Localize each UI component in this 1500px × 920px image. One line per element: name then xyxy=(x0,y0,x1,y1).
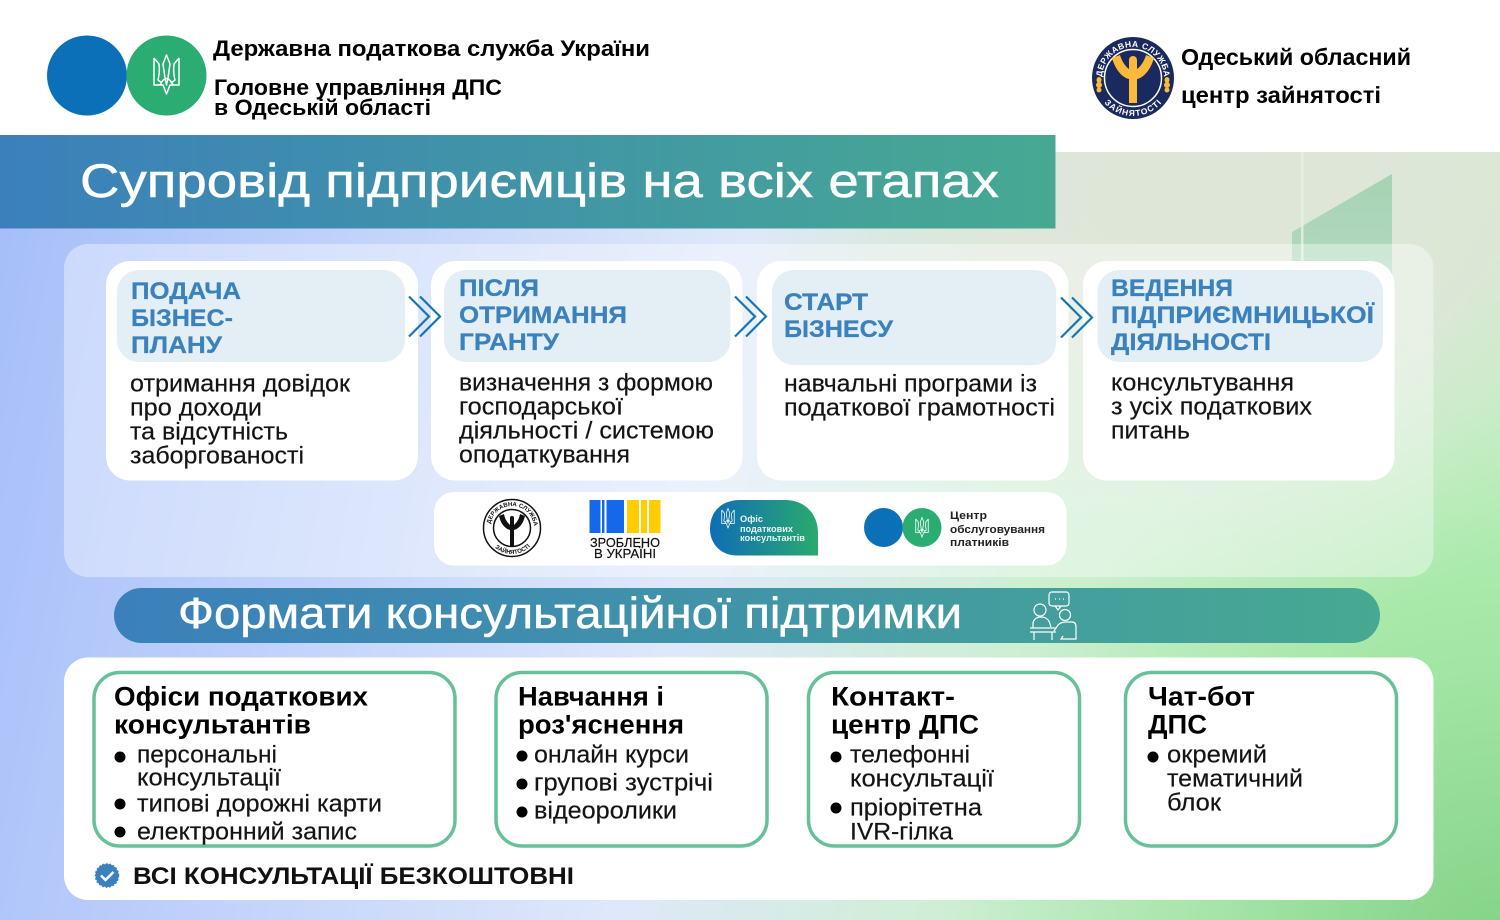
card: business plan submission: БІЗНЕС- xyxy=(131,305,233,332)
box: tax consultants offices: Офіси податкових xyxy=(114,682,368,712)
icon: made in Ukraine logo: В УКРАЇНІ xyxy=(594,547,656,561)
card: after grant: господарської xyxy=(459,394,623,420)
icon: tax consultants office logo: Офіс xyxy=(740,514,763,524)
card: business plan submission: ПЛАНУ xyxy=(131,332,223,359)
icon: consultation people xyxy=(1030,592,1076,640)
card: business plan submission: заборгованості xyxy=(130,442,304,470)
header: employment center logo and name xyxy=(1092,37,1411,119)
section heading band: Формати консультаційної підтримки xyxy=(178,589,962,638)
card: after grant: ПІСЛЯ xyxy=(459,275,539,302)
icon: employment service emblem: ДЕРЖАВНА СЛУЖБА xyxy=(1096,41,1170,78)
box: tax service chatbot: тематичний xyxy=(1167,766,1303,792)
box: tax service contact center: пріорітетна xyxy=(850,794,982,822)
box: training and explanations xyxy=(496,672,767,846)
card: running entrepreneurial activity: ВЕДЕННЯ xyxy=(1111,275,1233,302)
box: training and explanations: Навчання і xyxy=(518,682,664,712)
box: tax service contact center: центр ДПС xyxy=(831,710,979,740)
box: tax service chatbot: ДПС xyxy=(1148,710,1207,740)
card: after grant xyxy=(431,261,742,480)
header: tax service logo and name xyxy=(47,36,650,120)
tax service text xyxy=(213,36,650,120)
icon: made in Ukraine logo xyxy=(590,500,660,561)
box: tax service contact center: телефонні xyxy=(850,742,970,768)
arrow: stage one to two xyxy=(409,296,440,336)
box: tax service contact center: Контакт- xyxy=(831,682,955,712)
icon: tax consultants office logo: податкових xyxy=(740,524,793,534)
arrow: stage three to four xyxy=(1061,298,1092,338)
box: training and explanations: відеоролики xyxy=(534,798,677,824)
section heading band xyxy=(114,588,1380,643)
employment center text: Одеський обласний xyxy=(1181,44,1411,70)
icon: employment service emblem: ЗАЙНЯТОСТІ xyxy=(1105,100,1162,116)
card: running entrepreneurial activity xyxy=(1083,261,1394,480)
card: business start: навчальні програми із xyxy=(784,370,1037,398)
icon: tax service double circle logo xyxy=(47,36,206,116)
icon: taxpayer service center logo: Центр xyxy=(950,510,987,522)
card: running entrepreneurial activity: ПІДПРИЄМНИЦЬКОЇ xyxy=(1111,302,1375,329)
box: tax consultants offices xyxy=(94,672,455,846)
partner logos strip xyxy=(434,492,1066,566)
icon: tax consultants office logo xyxy=(710,500,818,556)
card: after grant: ГРАНТУ xyxy=(459,329,560,356)
card: running entrepreneurial activity: ДІЯЛЬНОСТІ xyxy=(1111,329,1271,356)
box: tax service chatbot: блок xyxy=(1167,790,1221,816)
box: tax consultants offices: консультантів xyxy=(114,710,311,740)
icon: employment service emblem xyxy=(1092,37,1174,119)
card: running entrepreneurial activity: консультування xyxy=(1111,370,1294,396)
card: business plan submission xyxy=(106,261,418,480)
card: running entrepreneurial activity: питань xyxy=(1111,418,1190,444)
tax service text: в Одеській області xyxy=(214,95,431,120)
card: business start xyxy=(757,261,1068,480)
icon: verified check badge xyxy=(96,864,118,887)
box: training and explanations: онлайн курси xyxy=(534,742,689,768)
icon: employment service black emblem xyxy=(482,498,542,558)
title banner xyxy=(0,135,1056,228)
box: tax service chatbot: Чат-бот xyxy=(1148,682,1255,712)
card: running entrepreneurial activity: з усіх податкових xyxy=(1111,394,1312,420)
employment center text: центр зайнятості xyxy=(1181,82,1381,108)
icon: employment service black emblem: ДЕРЖАВНА СЛУЖБА xyxy=(486,502,538,526)
panel: support stages xyxy=(64,244,1434,577)
box: tax consultants offices: консультації xyxy=(137,764,281,792)
box: tax service chatbot: окремий xyxy=(1167,742,1267,768)
card: business plan submission: про доходи xyxy=(130,394,262,422)
employment center text xyxy=(1181,44,1411,108)
tax service text: Державна податкова служба України xyxy=(213,36,650,61)
box: training and explanations: роз'яснення xyxy=(518,710,684,740)
tax service text: Головне управління ДПС xyxy=(214,75,502,100)
callout: all consultations free: ВСІ КОНСУЛЬТАЦІЇ БЕЗКОШТОВНІ xyxy=(133,863,574,890)
box: tax consultants offices: типові дорожні карти xyxy=(137,790,382,818)
card: after grant: визначення з формою xyxy=(459,370,713,396)
icon: made in Ukraine logo: ЗРОБЛЕНО xyxy=(590,536,660,550)
icon: taxpayer service center logo: обслуговування xyxy=(950,524,1045,536)
box: tax consultants offices: електронний запис xyxy=(137,818,357,846)
card: after grant: діяльності / системою xyxy=(459,418,714,444)
card: business start: СТАРТ xyxy=(784,289,868,316)
icon: tax consultants office logo: консультантів xyxy=(740,533,805,543)
icon: taxpayer service center logo: платників xyxy=(950,537,1009,549)
card: after grant: ОТРИМАННЯ xyxy=(459,302,627,329)
icon: taxpayer service center logo xyxy=(864,508,1045,549)
card: business start: податкової грамотності xyxy=(784,394,1055,422)
box: tax service chatbot xyxy=(1126,672,1396,846)
box: training and explanations: групові зустрічі xyxy=(534,770,713,796)
title banner: Супровід підприємців на всіх етапах xyxy=(80,154,999,207)
arrow: stage two to three xyxy=(735,296,766,336)
card: business plan submission: та відсутність xyxy=(130,418,288,446)
box: tax service contact center xyxy=(808,672,1080,846)
box: tax consultants offices: персональні xyxy=(137,742,277,768)
box: tax service contact center: IVR-гілка xyxy=(850,818,953,846)
box: tax service contact center: консультації xyxy=(850,766,994,792)
card: business plan submission: ПОДАЧА xyxy=(131,278,241,305)
icon: employment service black emblem: ЗАЙНЯТОСТІ xyxy=(496,544,530,554)
panel: consultation formats xyxy=(64,658,1434,900)
card: business start: БІЗНЕСУ xyxy=(784,316,894,343)
card: after grant: оподаткування xyxy=(459,442,630,468)
card: business plan submission: отримання довідок xyxy=(130,370,350,398)
